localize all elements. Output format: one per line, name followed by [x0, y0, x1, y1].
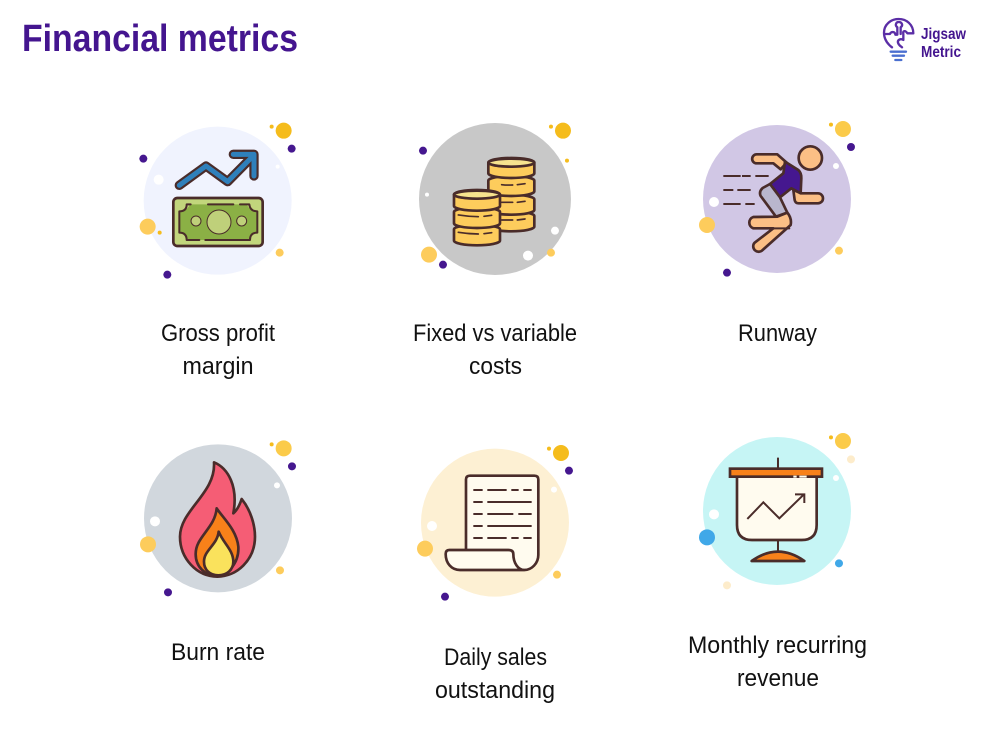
label: outstanding	[435, 677, 555, 704]
label: Burn rate	[171, 639, 265, 666]
logo wordmark: Metric	[921, 44, 961, 61]
panel: daily sales outstanding	[417, 445, 573, 704]
logo wordmark: Jigsaw	[921, 26, 966, 43]
label	[435, 644, 555, 704]
icon: money with rising arrow	[139, 123, 296, 279]
label: revenue	[737, 665, 819, 692]
label: costs	[469, 353, 522, 380]
icon: flame	[140, 440, 296, 596]
label: Monthly recurring	[688, 632, 867, 659]
icon: running person	[699, 121, 855, 277]
panel: burn rate	[140, 440, 296, 666]
label: Daily sales	[444, 644, 547, 671]
panel: monthly recurring revenue	[688, 433, 867, 692]
icon: coin stacks	[419, 123, 571, 275]
icon: puzzle light bulb	[884, 19, 913, 60]
logo wordmark	[921, 26, 966, 61]
panel: runway	[699, 121, 855, 347]
label	[413, 320, 577, 380]
title: Financial metrics	[22, 18, 298, 60]
icon: presentation board	[699, 433, 855, 589]
logo: Jigsaw Metric	[884, 19, 966, 61]
label: Fixed vs variable	[413, 320, 577, 347]
icon: paper scroll	[417, 445, 573, 601]
label: Gross profit	[161, 320, 275, 347]
panel: fixed vs variable costs	[413, 123, 577, 380]
label	[688, 632, 867, 692]
panel: gross profit margin	[139, 123, 296, 380]
label: Runway	[738, 320, 817, 347]
label: margin	[182, 353, 254, 380]
label	[161, 320, 275, 380]
